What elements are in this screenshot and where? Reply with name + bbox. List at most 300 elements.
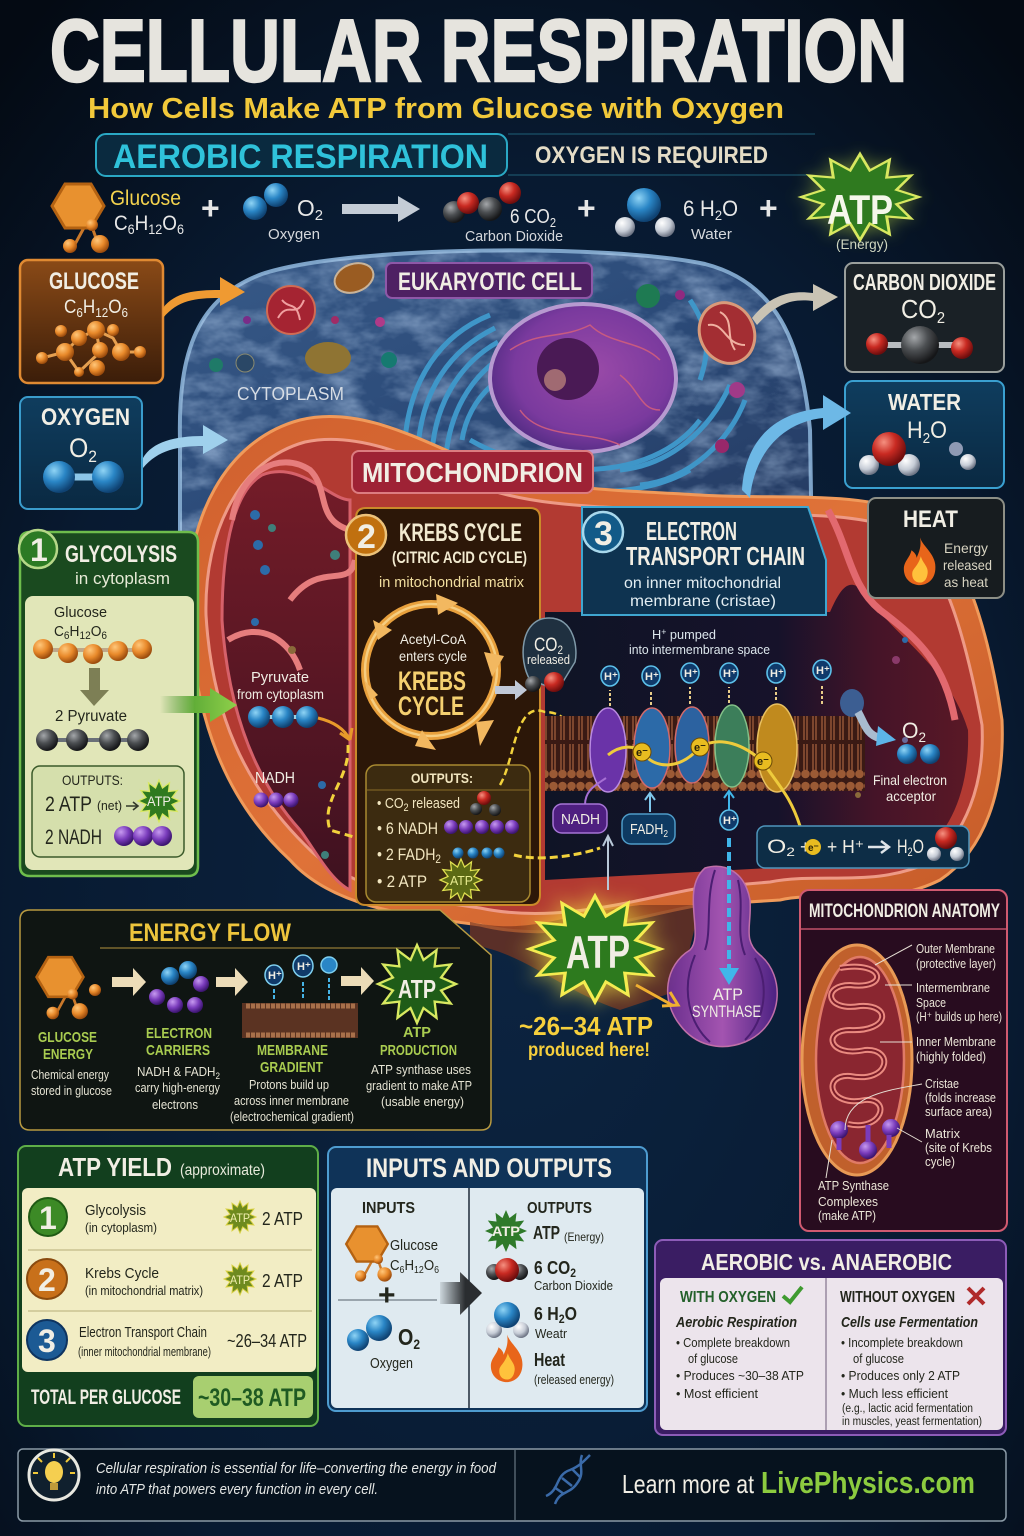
formula: C	[64, 297, 78, 318]
flame	[904, 538, 935, 585]
heading: ENERGY FLOW	[129, 919, 291, 947]
arrow: flow 2	[216, 968, 248, 996]
glucose label: Glucose	[54, 604, 107, 621]
H+ pumped note: pumped	[666, 627, 716, 642]
row: krebs cycle: 2 ATP	[262, 1271, 303, 1291]
row: electron transport chain: Electron Transport Chain	[79, 1324, 207, 1341]
ATP synthase	[668, 791, 777, 1047]
outputs box: 2	[435, 852, 441, 866]
CO2 released bubble: CO	[534, 635, 562, 656]
equation row	[52, 150, 923, 253]
output water: O	[565, 1304, 577, 1324]
output box: carbon dioxide	[845, 263, 1004, 372]
electrons	[633, 738, 772, 770]
input glucose: C	[390, 1257, 401, 1274]
molecule	[43, 461, 124, 493]
row: glycolysis: 1	[39, 1200, 57, 1236]
endoplasmic reticulum	[405, 300, 745, 491]
icon: DNA helix	[546, 1455, 590, 1504]
labels: Outer Membrane	[916, 942, 995, 956]
proton channel arrow: H⁺	[723, 815, 737, 827]
panel frame	[20, 910, 491, 1130]
table	[22, 1188, 316, 1372]
nucleus	[490, 304, 676, 452]
outputs box: 2 ATP	[45, 793, 92, 816]
final electron acceptor: O	[902, 718, 919, 743]
step: electron carriers: carry high-energy	[135, 1080, 220, 1095]
row: krebs cycle: 2	[38, 1262, 56, 1298]
panel frame	[655, 1240, 1006, 1435]
step: glucose energy: Chemical energy	[31, 1067, 109, 1082]
organelle: mitochondrion right	[689, 293, 765, 373]
row: krebs cycle: Krebs Cycle	[85, 1265, 159, 1282]
final electron acceptor: Final electron	[873, 772, 947, 788]
cell label: EUKARYOTIC CELL	[398, 268, 582, 296]
labels: (H⁺ builds up here)	[916, 1010, 1002, 1024]
step: ATP production	[366, 945, 472, 1109]
diagram: mitochondrion cross-section	[802, 945, 912, 1175]
aerobic column	[675, 1287, 804, 1401]
glucose formula: H	[70, 623, 79, 640]
labels: Space	[916, 996, 946, 1010]
output heat: (released energy)	[534, 1372, 614, 1387]
anaerobic column: in muscles, yeast fermentation)	[842, 1416, 982, 1428]
input glucose	[390, 1237, 439, 1276]
cycle text: Acetyl-CoA	[400, 631, 467, 647]
equation water label: Water	[691, 226, 732, 243]
row: electron transport chain: 3	[38, 1323, 56, 1359]
icon: water molecule	[615, 188, 675, 237]
synthase label	[692, 985, 761, 1021]
heading: GLYCOLYSIS	[65, 541, 177, 568]
pyruvate molecules	[248, 706, 318, 728]
outputs box: OUTPUTS:	[411, 770, 473, 786]
equation oxygen label: Oxygen	[268, 226, 320, 243]
electrons: e⁻	[757, 756, 769, 768]
labels: ATP Synthase	[818, 1179, 889, 1193]
aerobic column: • Most efficient	[676, 1386, 758, 1401]
input oxygen: 2	[413, 1336, 420, 1352]
total label: TOTAL PER GLUCOSE	[31, 1386, 181, 1409]
box	[845, 381, 1004, 488]
synthase label: ATP	[713, 985, 743, 1004]
note: as heat	[944, 574, 988, 590]
note: released	[943, 557, 992, 573]
labels: Complexes	[818, 1195, 878, 1209]
box	[845, 263, 1004, 372]
panel: aerobic vs anaerobic	[655, 1240, 1006, 1435]
equation ATP label: (Energy)	[836, 236, 888, 252]
step: electron carriers: NADH & FADH	[137, 1064, 224, 1079]
equation glucose formula: H	[135, 212, 148, 235]
step: glucose energy: ENERGY	[43, 1046, 93, 1063]
input glucose: Glucose	[390, 1237, 438, 1254]
output CO2: Carbon Dioxide	[534, 1278, 613, 1293]
outputs box: • 2 FADH	[377, 845, 447, 864]
organelle: mitochondrion top	[330, 258, 378, 298]
arrow: reaction	[342, 196, 420, 222]
burst star	[529, 896, 661, 1002]
location: on inner mitochondrial	[624, 575, 781, 592]
outputs box: OUTPUTS:	[62, 772, 123, 788]
footer message: into ATP that powers every function in every cell.	[96, 1481, 378, 1498]
equation glucose formula: 6	[177, 221, 184, 237]
nucleus spot	[544, 369, 566, 391]
electron path	[608, 742, 800, 826]
mitochondrion label: MITOCHONDRION	[362, 457, 583, 488]
body	[331, 1188, 644, 1408]
heading panel	[582, 507, 826, 615]
row: glycolysis: Glycolysis	[85, 1202, 146, 1219]
panel: ATP yield	[18, 1146, 318, 1426]
input glucose icon	[346, 1226, 392, 1282]
labels: (folds increase	[925, 1091, 996, 1105]
proton row: H⁺	[723, 668, 737, 680]
heading: OXYGEN	[41, 404, 130, 431]
cytoplasm label: CYTOPLASM	[237, 384, 344, 404]
ATP amount: ~26–34 ATP	[519, 1011, 653, 1041]
pyruvate chain	[36, 729, 149, 751]
water formation equation: O	[913, 837, 924, 858]
NADH molecules	[254, 792, 298, 808]
burst text: ATP	[566, 926, 630, 978]
output ATP	[486, 1211, 604, 1251]
icon: glucose hexagon	[52, 184, 109, 253]
equation glucose formula: C	[114, 212, 129, 235]
input glucose: H	[404, 1257, 414, 1274]
cycle text: CYCLE	[398, 691, 464, 721]
output water: Weatr	[535, 1326, 568, 1341]
output CO2	[486, 1258, 613, 1293]
FADH2 tag	[622, 793, 675, 844]
icon: ATP star: ATP	[827, 186, 893, 233]
H+ pumped note	[629, 627, 770, 657]
output box: heat	[868, 498, 1004, 598]
step: glucose energy: GLUCOSE	[38, 1029, 97, 1046]
arrow: CO2 out	[752, 284, 838, 325]
input glucose: 12	[414, 1265, 424, 1276]
equation water formula: 2	[715, 207, 722, 223]
labels: cycle)	[925, 1155, 955, 1169]
equation glucose formula: 6	[128, 221, 135, 237]
formula: CO	[901, 294, 940, 324]
step: membrane gradient: across inner membrane	[234, 1093, 349, 1108]
membrane	[545, 716, 865, 791]
formula: 6	[121, 305, 128, 320]
row: glycolysis: (in cytoplasm)	[85, 1220, 157, 1235]
proton row: H⁺	[816, 665, 830, 677]
membrane proteins	[590, 704, 797, 792]
outputs box: • 2 ATP	[377, 872, 427, 891]
equation oxygen formula: O	[297, 195, 315, 221]
outputs box	[32, 766, 184, 857]
cycle text: enters cycle	[399, 648, 467, 664]
anaerobic column: (e.g., lactic acid fermentation	[842, 1403, 973, 1415]
heading: ELECTRON	[646, 516, 737, 546]
arrow: flow 1	[112, 968, 146, 996]
row: glycolysis: ATP	[230, 1211, 250, 1225]
arrow: up to NADH path	[603, 836, 613, 890]
arrow: dashed electron path up	[500, 710, 572, 785]
output ATP: (Energy)	[564, 1230, 604, 1244]
formula: H	[907, 417, 924, 444]
cell body	[180, 250, 812, 560]
output water	[486, 1302, 577, 1341]
formula: O	[108, 297, 121, 318]
website: LivePhysics.com	[761, 1465, 975, 1500]
output heat	[491, 1334, 614, 1387]
glucose formula: 12	[79, 630, 91, 642]
water formation equation: +	[800, 837, 811, 857]
icon: oxygen molecule	[243, 183, 288, 220]
outputs box: (net)	[97, 798, 122, 813]
equation CO2 label: Carbon Dioxide	[465, 228, 563, 245]
H+ pumped note: H	[652, 627, 661, 642]
final electron acceptor: acceptor	[886, 788, 936, 804]
panel frame	[18, 1146, 318, 1426]
step: electron carriers: CARRIERS	[146, 1042, 210, 1059]
row: electron transport chain	[27, 1320, 307, 1360]
input oxygen: O	[398, 1324, 416, 1350]
output heat: Heat	[534, 1350, 565, 1370]
leader lines	[826, 945, 922, 1178]
big ATP burst	[519, 836, 678, 1061]
synthase label: SYNTHASE	[692, 1002, 761, 1021]
arrow: down	[80, 668, 109, 706]
nucleus veins	[510, 325, 660, 445]
box	[20, 260, 163, 383]
water formation equation: + H⁺	[827, 837, 864, 857]
NADH tag: NADH	[561, 811, 600, 828]
mitochondrial strands behind ATP	[470, 905, 700, 1010]
cycle text	[398, 631, 467, 721]
labels: Cristae	[925, 1077, 959, 1091]
proton row	[601, 660, 831, 706]
intermembrane layer	[206, 439, 982, 913]
arrow: water out	[742, 395, 851, 498]
outputs box: ATP	[147, 793, 171, 809]
heading note: (approximate)	[180, 1162, 265, 1179]
input glucose: O	[424, 1257, 434, 1274]
row: krebs cycle	[27, 1259, 303, 1299]
formula: H	[83, 297, 95, 318]
panel: energy flow	[20, 910, 491, 1130]
labels: Intermembrane	[916, 981, 990, 995]
step badge: 3	[594, 515, 613, 553]
total value: ~30–38 ATP	[198, 1384, 306, 1412]
learn more: Learn more at	[622, 1469, 755, 1499]
panel frame	[328, 1147, 647, 1411]
input box: oxygen	[20, 397, 142, 509]
glucose chain	[33, 639, 152, 664]
aerobic column: WITH OXYGEN	[680, 1289, 776, 1306]
banner heading: AEROBIC RESPIRATION	[113, 138, 488, 176]
formula: 2	[937, 310, 945, 327]
step: membrane gradient: (electrochemical gradient)	[230, 1109, 354, 1124]
output CO2: 6 CO	[534, 1258, 576, 1278]
step: ATP production: ATP	[403, 1024, 431, 1041]
panel: mitochondrion anatomy	[800, 890, 1007, 1231]
panel: glycolysis	[19, 530, 198, 876]
step: membrane gradient: H⁺	[297, 961, 311, 973]
output CO2: 2	[570, 1266, 576, 1280]
outputs box: • CO	[377, 795, 409, 812]
heading: HEAT	[903, 506, 958, 533]
formula: 6	[76, 305, 83, 320]
aerobic column: • Complete breakdown	[676, 1335, 790, 1350]
row: glycolysis: 2 ATP	[262, 1209, 303, 1229]
output water: 6 H	[534, 1304, 562, 1324]
eukaryotic cell	[180, 250, 812, 560]
heading: GLUCOSE	[49, 268, 139, 295]
equation water formula: O	[722, 196, 738, 221]
plus sign: +	[759, 190, 778, 226]
proton row: H⁺	[604, 671, 618, 683]
organelle: golden vesicle	[305, 342, 351, 374]
input glucose: 6	[400, 1265, 405, 1276]
box	[868, 498, 1004, 598]
water formation equation: 2	[786, 845, 795, 859]
CO2 released bubble: released	[527, 652, 570, 667]
heading: WATER	[888, 389, 961, 415]
left matrix	[222, 472, 350, 890]
anaerobic column: Cells use Fermentation	[841, 1314, 978, 1331]
molecule	[866, 326, 973, 364]
icon: light bulb	[29, 1450, 79, 1500]
water formation equation: 2	[908, 845, 913, 859]
anaerobic column: of glucose	[853, 1351, 904, 1366]
step: glucose energy	[31, 957, 112, 1098]
step: ATP production: PRODUCTION	[380, 1042, 457, 1059]
body	[660, 1278, 1003, 1430]
plus sign: +	[201, 190, 220, 226]
anaerobic column: • Much less efficient	[841, 1386, 948, 1401]
step: electron carriers: 2	[215, 1071, 220, 1081]
step: ATP production: gradient to make ATP	[366, 1078, 472, 1093]
aerobic column: of glucose	[688, 1351, 738, 1366]
step: membrane gradient	[230, 955, 358, 1124]
input glucose: 6	[434, 1265, 439, 1276]
water formation equation	[757, 826, 969, 868]
heading: KREBS CYCLE	[399, 519, 522, 547]
outputs box	[366, 765, 530, 902]
organelle: mitochondrion left	[267, 286, 315, 334]
equation CO2 formula: 2	[550, 215, 556, 230]
outputs box: 2 NADH	[45, 826, 102, 849]
plus: +	[378, 1279, 396, 1312]
pyruvate label	[237, 669, 324, 702]
icon: carbon dioxide molecules	[443, 182, 521, 223]
subheading: (CITRIC ACID CYCLE)	[392, 548, 527, 567]
anaerobic column: • Incomplete breakdown	[841, 1335, 963, 1350]
nucleolus	[537, 338, 599, 400]
labels: Inner Membrane	[916, 1035, 996, 1049]
step: membrane gradient: GRADIENT	[260, 1059, 323, 1076]
anaerobic column: WITHOUT OXYGEN	[840, 1289, 955, 1306]
step: ATP production: ATP synthase uses	[371, 1062, 471, 1077]
labels: (make ATP)	[818, 1209, 876, 1223]
synthase ribs	[688, 870, 764, 1042]
CO2 released bubble	[523, 618, 576, 692]
step badge	[583, 512, 623, 553]
heading line 2: TRANSPORT CHAIN	[626, 541, 805, 571]
formula: 2	[923, 430, 930, 447]
box	[20, 397, 142, 509]
outputs box: ATP	[450, 873, 473, 888]
step badge: 2	[357, 518, 376, 556]
cytoplasm texture	[180, 250, 812, 560]
note	[943, 540, 992, 590]
tail from membrane to oxygen	[840, 689, 896, 746]
labels: (highly folded)	[916, 1050, 986, 1064]
banner: aerobic respiration	[96, 134, 815, 176]
row: krebs cycle: (in mitochondrial matrix)	[85, 1283, 203, 1298]
step badge: 1	[30, 532, 48, 568]
anaerobic column	[840, 1288, 984, 1428]
water formation equation: O	[767, 837, 782, 858]
banner note: OXYGEN IS REQUIRED	[535, 142, 768, 169]
inner panel	[25, 596, 194, 870]
plus	[338, 1279, 437, 1312]
mitochondrion label	[352, 451, 593, 493]
molecule	[36, 321, 146, 377]
glucose formula: 6	[101, 630, 107, 642]
proton row: H⁺	[770, 668, 784, 680]
vesicle dots	[209, 284, 745, 453]
water formation equation: H	[897, 837, 911, 858]
heading: INPUTS AND OUTPUTS	[366, 1153, 612, 1183]
right matrix	[545, 585, 968, 880]
subtitle: How Cells Make ATP from Glucose with Oxygen	[88, 93, 784, 125]
row: electron transport chain: (inner mitochondrial membrane)	[78, 1344, 211, 1359]
panel frame	[20, 532, 198, 876]
step badge	[346, 515, 386, 556]
equation glucose formula: 12	[148, 221, 162, 237]
CO2 released bubble: 2	[557, 643, 563, 657]
footer message: Cellular respiration is essential for life–converting the energy in food	[96, 1460, 497, 1477]
proton row: H⁺	[684, 668, 698, 680]
aerobic column: • Produces ~30–38 ATP	[676, 1368, 804, 1383]
arrow: pyruvate to krebs	[318, 718, 352, 740]
outputs box: 2	[404, 802, 409, 814]
input box: glucose	[20, 260, 163, 383]
plus sign: +	[577, 190, 596, 226]
output water: 2	[559, 1312, 565, 1326]
location: in mitochondrial matrix	[379, 574, 524, 591]
arrow: CO2 out of cycle	[495, 680, 527, 700]
NADH tag	[553, 778, 607, 833]
input oxygen icon	[347, 1315, 392, 1351]
matrix dots	[250, 510, 908, 859]
FADH2 tag: 2	[663, 829, 668, 840]
equation oxygen formula: 2	[315, 207, 323, 224]
equation CO2 formula: 6 CO	[510, 206, 557, 228]
formula: O	[930, 417, 947, 444]
output box: water	[845, 381, 1004, 488]
pyruvate label: 2 Pyruvate	[55, 708, 127, 725]
step: membrane gradient: MEMBRANE	[257, 1042, 328, 1059]
output ATP: ATP	[533, 1223, 560, 1243]
anaerobic column: • Produces only 2 ATP	[841, 1368, 960, 1383]
formula: 12	[95, 305, 108, 320]
step: electron carriers	[135, 961, 220, 1112]
panel: electron transport chain	[545, 507, 969, 868]
input oxygen	[370, 1324, 420, 1372]
step: glucose energy: stored in glucose	[31, 1083, 112, 1098]
FADH2 tag: FADH	[630, 821, 670, 838]
H+ pumped note: into intermembrane space	[629, 642, 770, 657]
footer	[18, 1449, 1006, 1521]
